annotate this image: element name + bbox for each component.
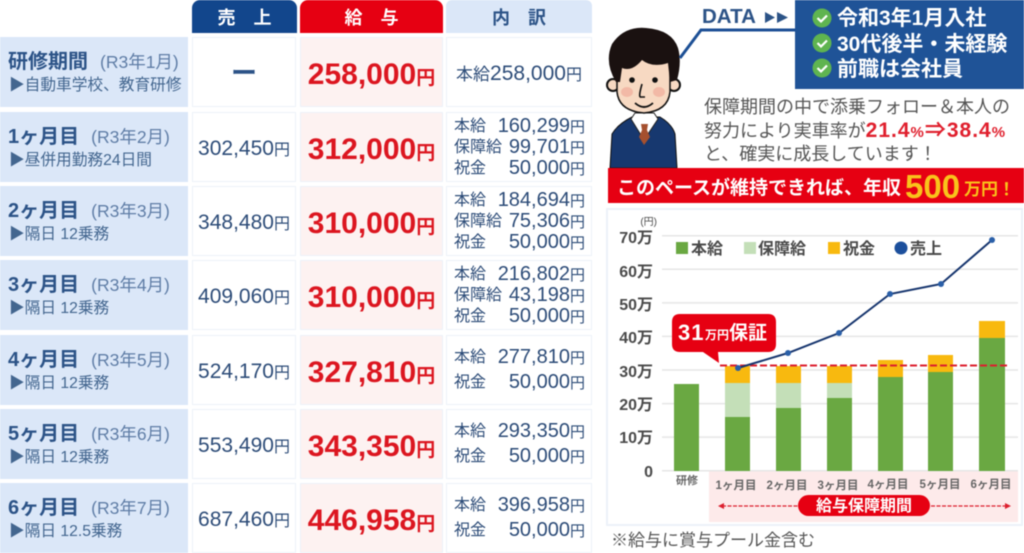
table row: 6ヶ月目: 本給	[454, 497, 486, 514]
description text	[704, 97, 1010, 164]
description text: と、確実に成長しています！	[704, 144, 937, 164]
y axis labels	[619, 217, 657, 481]
description text: 努力により実車率が21.4%⇒38.4%	[704, 119, 1006, 142]
table row: 2ヶ月目: 本給	[454, 192, 486, 209]
gridlines and y axis	[662, 236, 1018, 471]
table row: 3ヶ月目: 保障給	[454, 287, 502, 304]
red banner	[608, 168, 1024, 205]
y axis labels: 40万	[619, 330, 653, 347]
table row: 1ヶ月目: 160,299円	[498, 115, 585, 137]
table row: 3ヶ月目: 本給	[454, 266, 486, 283]
table row: 1ヶ月目	[0, 112, 592, 182]
legend: 保障給	[758, 240, 806, 258]
table row: 5ヶ月目: 553,490円	[198, 434, 290, 457]
table row: 5ヶ月目: 本給	[454, 423, 486, 440]
table row: 2ヶ月目: 310,000円	[308, 207, 435, 240]
x axis labels	[676, 473, 1011, 492]
table row: 1ヶ月目: 302,450円	[198, 137, 290, 160]
x axis labels: 6ヶ月目	[971, 478, 1011, 491]
data box	[795, 0, 1024, 89]
table row: 3ヶ月目: 50,000円	[509, 305, 585, 327]
DATA label and connector	[680, 5, 796, 58]
table row: 4ヶ月目: 本給	[454, 349, 486, 366]
DATA label and connector: DATA	[702, 5, 756, 28]
table row: 6ヶ月目	[0, 482, 592, 553]
bars	[674, 321, 1005, 471]
table row: 1ヶ月目: 本給	[454, 118, 486, 135]
table row: 5ヶ月目: 祝金	[454, 448, 486, 465]
y axis labels: 50万	[619, 297, 653, 314]
table row: 研修期間	[0, 36, 592, 108]
table row: 3ヶ月目: ▶隔日 12乗務	[9, 300, 109, 317]
table row: 5ヶ月目: 5ヶ月目 (R3年6月)	[8, 423, 170, 445]
table row: 1ヶ月目: 保障給	[454, 139, 502, 156]
table row: 1ヶ月目: 312,000円	[308, 133, 435, 166]
legend	[676, 239, 942, 258]
table row: 2ヶ月目: ▶隔日 12乗務	[9, 226, 109, 243]
table row: 6ヶ月目: 687,460円	[198, 508, 290, 531]
table row: 研修期間: 258,000円	[308, 58, 435, 91]
y axis labels: 20万	[619, 397, 653, 414]
table row: 6ヶ月目: 396,958円	[498, 494, 585, 516]
table row: 4ヶ月目: 524,170円	[198, 360, 290, 383]
table row: 1ヶ月目: 50,000円	[509, 157, 585, 179]
x axis labels: 4ヶ月目	[868, 478, 908, 491]
table row: 6ヶ月目: 446,958円	[308, 504, 435, 537]
data box: 前職は会社員	[837, 58, 963, 81]
table row: 6ヶ月目: 6ヶ月目 (R3年7月)	[8, 497, 170, 519]
x axis labels: 1ヶ月目	[716, 479, 756, 492]
x axis labels: 2ヶ月目	[767, 479, 807, 492]
guarantee period arrow	[718, 495, 1011, 516]
y axis labels: 30万	[619, 364, 653, 381]
table row: 4ヶ月目: 327,810円	[308, 356, 435, 389]
y axis labels: (円)	[640, 217, 657, 228]
data box: 30代後半・未経験	[837, 33, 1007, 56]
table row: 5ヶ月目: 343,350円	[308, 430, 435, 463]
table row: 5ヶ月目: 50,000円	[509, 445, 585, 467]
header: 給与	[300, 0, 443, 33]
sales line	[735, 237, 995, 371]
table row: 2ヶ月目: 祝金	[454, 234, 486, 251]
x axis labels: 研修	[676, 473, 698, 487]
header: 内訳: 内 訳	[492, 8, 546, 28]
y axis labels: 0	[644, 464, 653, 481]
table row: 2ヶ月目: 50,000円	[509, 231, 585, 253]
table row: 研修期間: 本給258,000円	[456, 62, 582, 85]
legend: 売上	[910, 240, 942, 258]
footnote: ※給与に賞与プール金含む	[611, 531, 815, 550]
data box: 令和3年1月入社	[837, 7, 986, 30]
table row: 2ヶ月目	[0, 186, 592, 256]
legend: 本給	[691, 240, 723, 258]
red banner: 500	[905, 168, 960, 205]
icon: man in suit	[607, 28, 680, 168]
table row: 5ヶ月目: ▶隔日 12乗務	[9, 449, 109, 466]
table row: 1ヶ月目: 99,701円	[509, 136, 585, 158]
table row: 3ヶ月目: 祝金	[454, 308, 486, 325]
table row: 2ヶ月目: 184,694円	[498, 189, 585, 211]
table row: 2ヶ月目: 保障給	[454, 213, 502, 230]
table row: 3ヶ月目: 216,802円	[498, 263, 585, 285]
table row: 研修期間: ▶自動車学校、教育研修	[9, 77, 182, 94]
header: 売上: 売 上	[218, 8, 272, 28]
table row: 4ヶ月目: 50,000円	[509, 371, 585, 393]
x axis labels: 5ヶ月目	[920, 478, 960, 491]
red banner: 万円！	[964, 180, 1015, 199]
chart panel	[607, 209, 1022, 525]
header: 内訳	[446, 0, 592, 33]
table row: 研修期間: 研修期間 (R3年1月)	[8, 51, 179, 73]
table row: 6ヶ月目: 50,000円	[509, 519, 585, 541]
table row: 1ヶ月目: 祝金	[454, 160, 486, 177]
table row: 4ヶ月目: ▶隔日 12乗務	[9, 375, 109, 392]
x axis labels: 3ヶ月目	[818, 479, 858, 492]
table row: 4ヶ月目	[0, 334, 592, 406]
table row: 2ヶ月目: 2ヶ月目 (R3年3月)	[8, 200, 170, 222]
table row: 4ヶ月目: 277,810円	[498, 346, 585, 368]
table row: 3ヶ月目	[0, 260, 592, 330]
callout: 31万円保証: 31	[678, 320, 704, 345]
table row: 5ヶ月目	[0, 408, 592, 480]
table row: 3ヶ月目: 3ヶ月目 (R3年4月)	[8, 274, 170, 296]
callout: 31万円保証: 万円保証	[705, 322, 767, 344]
callout: 31万円保証	[672, 314, 776, 363]
table row: 1ヶ月目: ▶昼併用勤務24日間	[9, 152, 152, 169]
table row: 5ヶ月目: 293,350円	[498, 420, 585, 442]
guarantee dashed line	[720, 364, 1008, 366]
table row: 3ヶ月目: 310,000円	[308, 281, 435, 314]
legend: 祝金	[843, 239, 875, 258]
y axis labels: 70万	[619, 230, 653, 247]
table row: 3ヶ月目: 409,060円	[198, 285, 290, 308]
y axis labels: 10万	[619, 430, 653, 447]
header: 給与: 給 与	[344, 8, 398, 28]
table row: 4ヶ月目: 祝金	[454, 374, 486, 391]
guarantee period arrow: 給与保障期間	[816, 497, 912, 515]
table row: 2ヶ月目: 75,306円	[509, 210, 585, 232]
table row: 2ヶ月目: 348,480円	[198, 211, 290, 234]
table row: 6ヶ月目: ▶隔日 12.5乗務	[9, 523, 122, 540]
table row: 3ヶ月目: 43,198円	[509, 284, 585, 306]
table row: 4ヶ月目: 4ヶ月目 (R3年5月)	[8, 349, 170, 371]
description text: 保障期間の中で添乗フォロー＆本人の	[704, 97, 1010, 117]
table row: 研修期間: ー	[231, 58, 257, 88]
header: 売上	[192, 0, 297, 33]
red banner: このペースが維持できれば、年収	[617, 176, 901, 199]
table row: 1ヶ月目: 1ヶ月目 (R3年2月)	[8, 126, 170, 148]
table row: 6ヶ月目: 祝金	[454, 522, 486, 539]
y axis labels: 60万	[619, 264, 653, 281]
